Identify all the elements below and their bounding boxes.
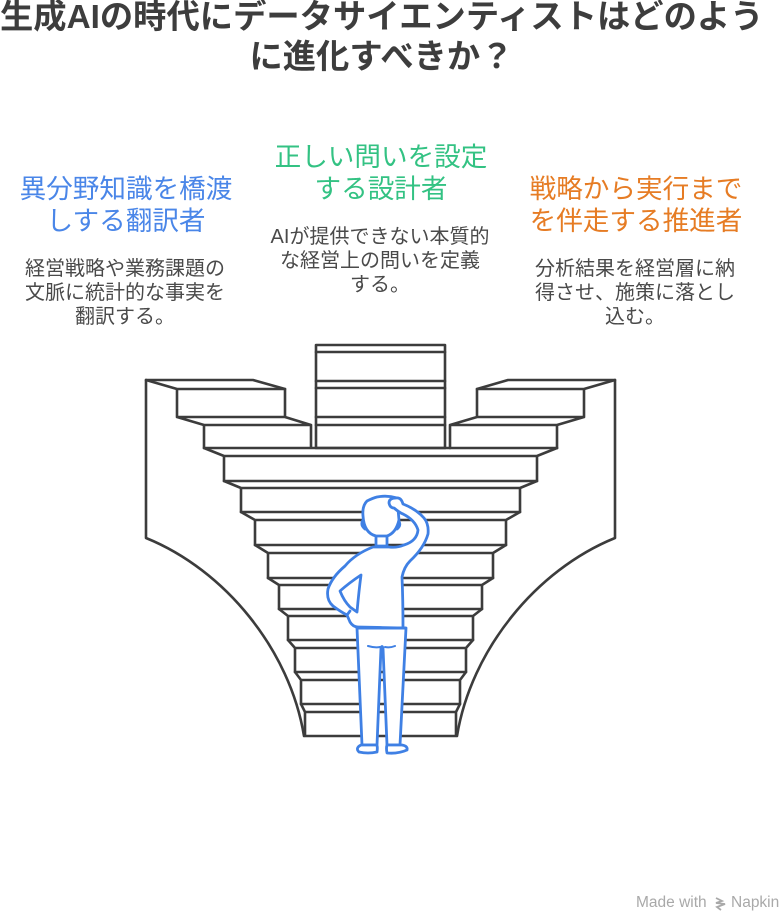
heading: right column — [530, 174, 742, 236]
text block: right column: 得させ、施策に落とし — [535, 282, 735, 304]
text block: right column: 込む。 — [605, 306, 665, 328]
heading: center column: する設計者 — [315, 174, 447, 204]
head — [363, 496, 399, 536]
text block: center column: AIが提供できない本質的 — [271, 226, 489, 248]
legs — [357, 628, 406, 745]
footer: made with Napkin: Made with — [636, 894, 707, 911]
lower steps — [204, 448, 557, 736]
heading: left column: 異分野知識を橋渡 — [20, 174, 232, 204]
person — [328, 496, 428, 753]
heading: left column: しする翻訳者 — [46, 206, 206, 236]
center column — [316, 345, 445, 448]
heading: center column: 正しい問いを設定 — [275, 142, 487, 172]
hip line — [368, 646, 395, 647]
text block: left column: 文脈に統計的な事実を — [25, 282, 225, 304]
left foot — [357, 745, 377, 753]
heading: center column — [275, 142, 487, 204]
title: 生成AIの時代にデータサイエンティストはどのよう — [0, 0, 764, 36]
footer: made with Napkin — [636, 894, 779, 911]
left wall and upper steps — [146, 380, 557, 736]
title — [0, 0, 764, 76]
footer: made with Napkin: Napkin — [731, 894, 779, 911]
text block: left column: 翻訳する。 — [75, 306, 175, 328]
text block: left column — [25, 258, 225, 328]
neck — [376, 534, 387, 546]
right wall and upper steps — [450, 380, 615, 736]
title: に進化すべきか？ — [249, 38, 514, 76]
text block: center column — [270, 226, 489, 296]
wrist — [347, 611, 350, 615]
torso and raised arm — [328, 498, 428, 628]
heading: left column — [20, 174, 232, 236]
ears — [362, 520, 400, 529]
staircase — [146, 345, 615, 736]
waist — [357, 626, 405, 630]
icon: Napkin logo — [715, 897, 726, 911]
text block: center column: する。 — [350, 274, 410, 296]
text block: center column: な経営上の問いを定義 — [280, 250, 480, 272]
heading: right column: を伴走する推進者 — [530, 206, 742, 236]
text block: right column — [535, 258, 735, 328]
text block: right column: 分析結果を経営層に納 — [535, 258, 735, 280]
text block: left column: 経営戦略や業務課題の — [25, 258, 225, 280]
heading: right column: 戦略から実行まで — [530, 174, 742, 204]
right foot — [386, 745, 407, 753]
inner arm gap — [340, 575, 361, 612]
